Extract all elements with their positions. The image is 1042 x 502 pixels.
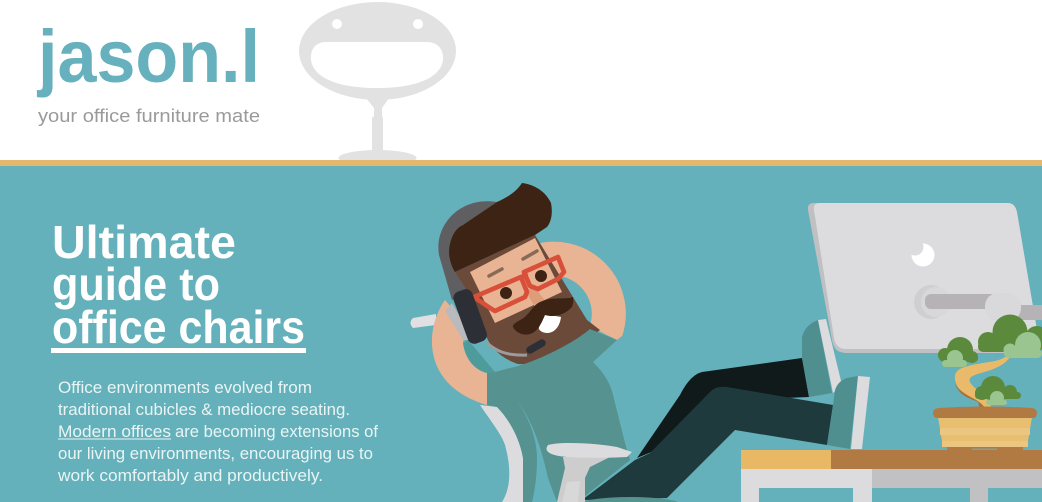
intro text block: work comfortably and productively. <box>57 466 323 485</box>
shirt <box>487 329 630 502</box>
headset earpiece <box>445 303 473 340</box>
face <box>470 238 562 323</box>
chair headrest tip <box>410 314 436 328</box>
monitor arm <box>914 285 948 319</box>
illustration: bonsai tree <box>933 314 1042 451</box>
icon: header chair silhouette <box>299 2 456 166</box>
desk top <box>831 450 1042 469</box>
intro text block: Modern offices <box>58 422 171 441</box>
intro text block <box>57 378 378 485</box>
pot rim <box>933 406 1037 418</box>
left foliage <box>938 337 978 363</box>
glasses <box>474 257 564 311</box>
desk frame right <box>872 469 1042 502</box>
title: guide to <box>52 258 220 310</box>
header divider band <box>0 160 1042 166</box>
illustration: man reclining in office chair <box>410 183 870 502</box>
intro text block: our living environments, encouraging us to <box>58 444 373 463</box>
intro text block: Office environments evolved from <box>58 378 312 397</box>
eyes <box>500 287 512 299</box>
mustache <box>513 297 573 335</box>
back shoe <box>802 320 832 397</box>
trunk <box>955 357 1010 410</box>
apple logo <box>912 244 934 266</box>
left arm behind head <box>432 300 487 405</box>
pot feet <box>947 447 1023 451</box>
front shoe <box>827 376 858 449</box>
title: Ultimate <box>52 216 236 268</box>
illustration: desk <box>741 450 1042 502</box>
nose <box>525 288 547 307</box>
desk top light end <box>741 450 831 469</box>
seat cushion <box>578 497 682 502</box>
front leg <box>582 387 833 500</box>
eyebrows <box>489 251 537 276</box>
monitor edge <box>808 203 1037 353</box>
hair <box>449 183 552 272</box>
chair post <box>557 457 610 502</box>
headset mic <box>487 343 527 355</box>
back leg <box>637 358 809 458</box>
top foliage <box>978 314 1042 352</box>
armrest <box>546 443 632 458</box>
logo tagline: your office furniture mate <box>38 106 260 126</box>
head and beard <box>455 235 600 364</box>
title <box>51 216 306 353</box>
tooth <box>539 314 561 333</box>
intro text block: are becoming extensions of <box>175 422 378 441</box>
title: office chairs <box>52 301 305 353</box>
pot body <box>938 417 1032 447</box>
right arm behind head <box>535 259 609 331</box>
chair back <box>480 405 523 502</box>
headset band <box>438 201 497 300</box>
lower foliage <box>975 376 1021 400</box>
right forearm end <box>587 324 622 340</box>
intro text block: traditional cubicles & mediocre seating. <box>58 400 350 419</box>
logo <box>36 15 260 126</box>
desk frame left <box>741 469 872 502</box>
shirt sleeve <box>463 340 495 373</box>
logo wordmark: jason.l <box>36 15 260 98</box>
monitor back <box>814 203 1037 349</box>
illustration: monitor on arm <box>808 203 1042 353</box>
